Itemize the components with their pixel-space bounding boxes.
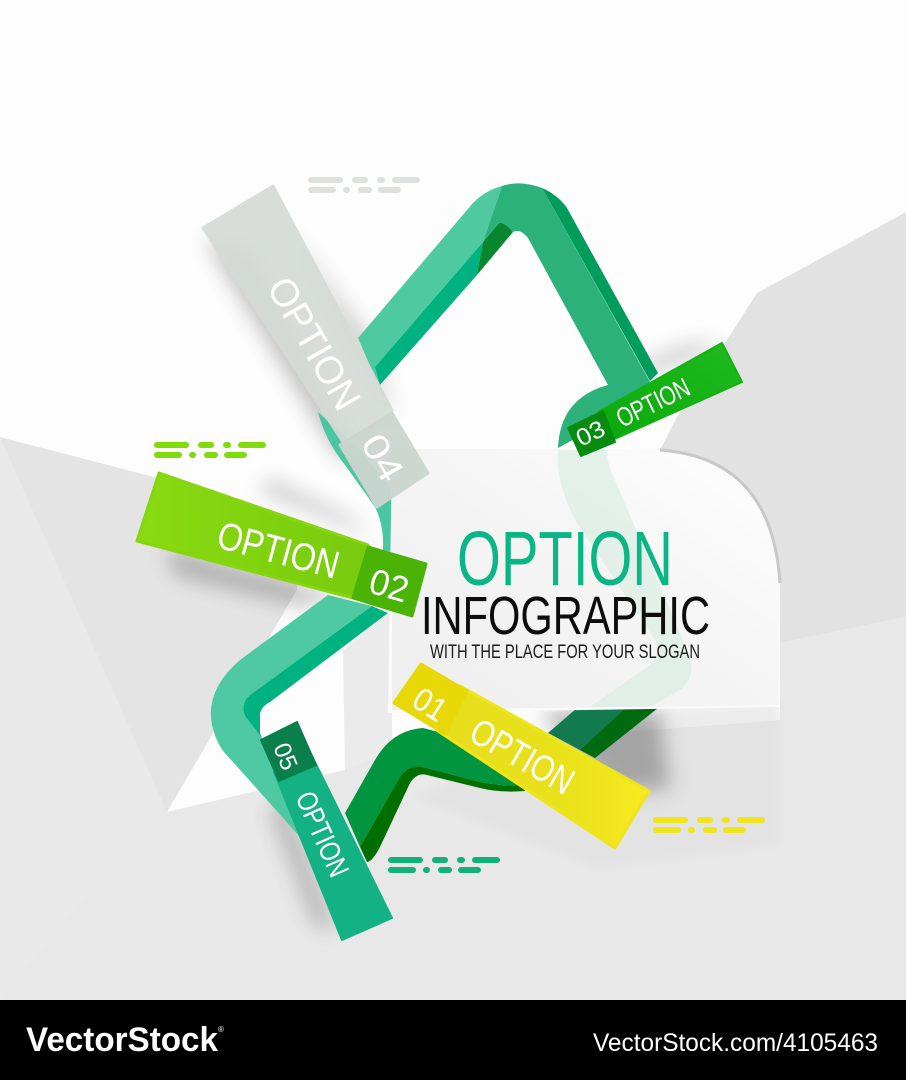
dashes: gray: [311, 180, 417, 190]
ribbon: left loop: [211, 412, 392, 837]
dashes: yellow: [656, 820, 762, 830]
ribbon: bottom dark: [345, 708, 658, 862]
ribbon: top loop: [358, 183, 658, 448]
tag 01: [394, 664, 649, 848]
title: WITH THE PLACE FOR YOUR SLOGAN: [430, 642, 700, 663]
shadows: [165, 225, 725, 930]
dashes: green: [391, 860, 497, 870]
small dashes: [157, 180, 762, 870]
footer bar: VectorStock.com/4105463: [593, 1029, 878, 1057]
main band: [483, 183, 650, 448]
tag 04: 04: [353, 426, 413, 489]
light band: [358, 186, 502, 400]
footer bar: ®: [218, 1025, 224, 1034]
tag 03: OPTION: [611, 372, 695, 433]
title: INFOGRAPHIC: [421, 586, 710, 646]
tag 01: 01: [406, 680, 454, 729]
central glass panel: [388, 449, 780, 713]
footer bar: VectorStock: [26, 1021, 218, 1059]
dashes: lime: [157, 445, 263, 455]
tag 05: OPTION: [289, 787, 354, 882]
tag 04: [203, 186, 428, 507]
dark inner corner: [477, 223, 513, 275]
tag 05: [261, 722, 392, 940]
medium band: [375, 242, 483, 385]
tag 02: OPTION: [213, 514, 344, 588]
title: [421, 516, 710, 663]
footer bar: [0, 1000, 906, 1080]
glass ribbon: [558, 450, 691, 707]
tag 01: OPTION: [463, 710, 581, 802]
tag 03: 03: [572, 415, 610, 452]
tag 02: 02: [365, 560, 414, 610]
right dark edge: [542, 188, 658, 381]
tag 02: [137, 473, 426, 616]
tag 05: 05: [267, 739, 303, 774]
title: OPTION: [457, 516, 673, 602]
tag 03: [568, 343, 742, 456]
tag 04: OPTION: [258, 270, 368, 418]
